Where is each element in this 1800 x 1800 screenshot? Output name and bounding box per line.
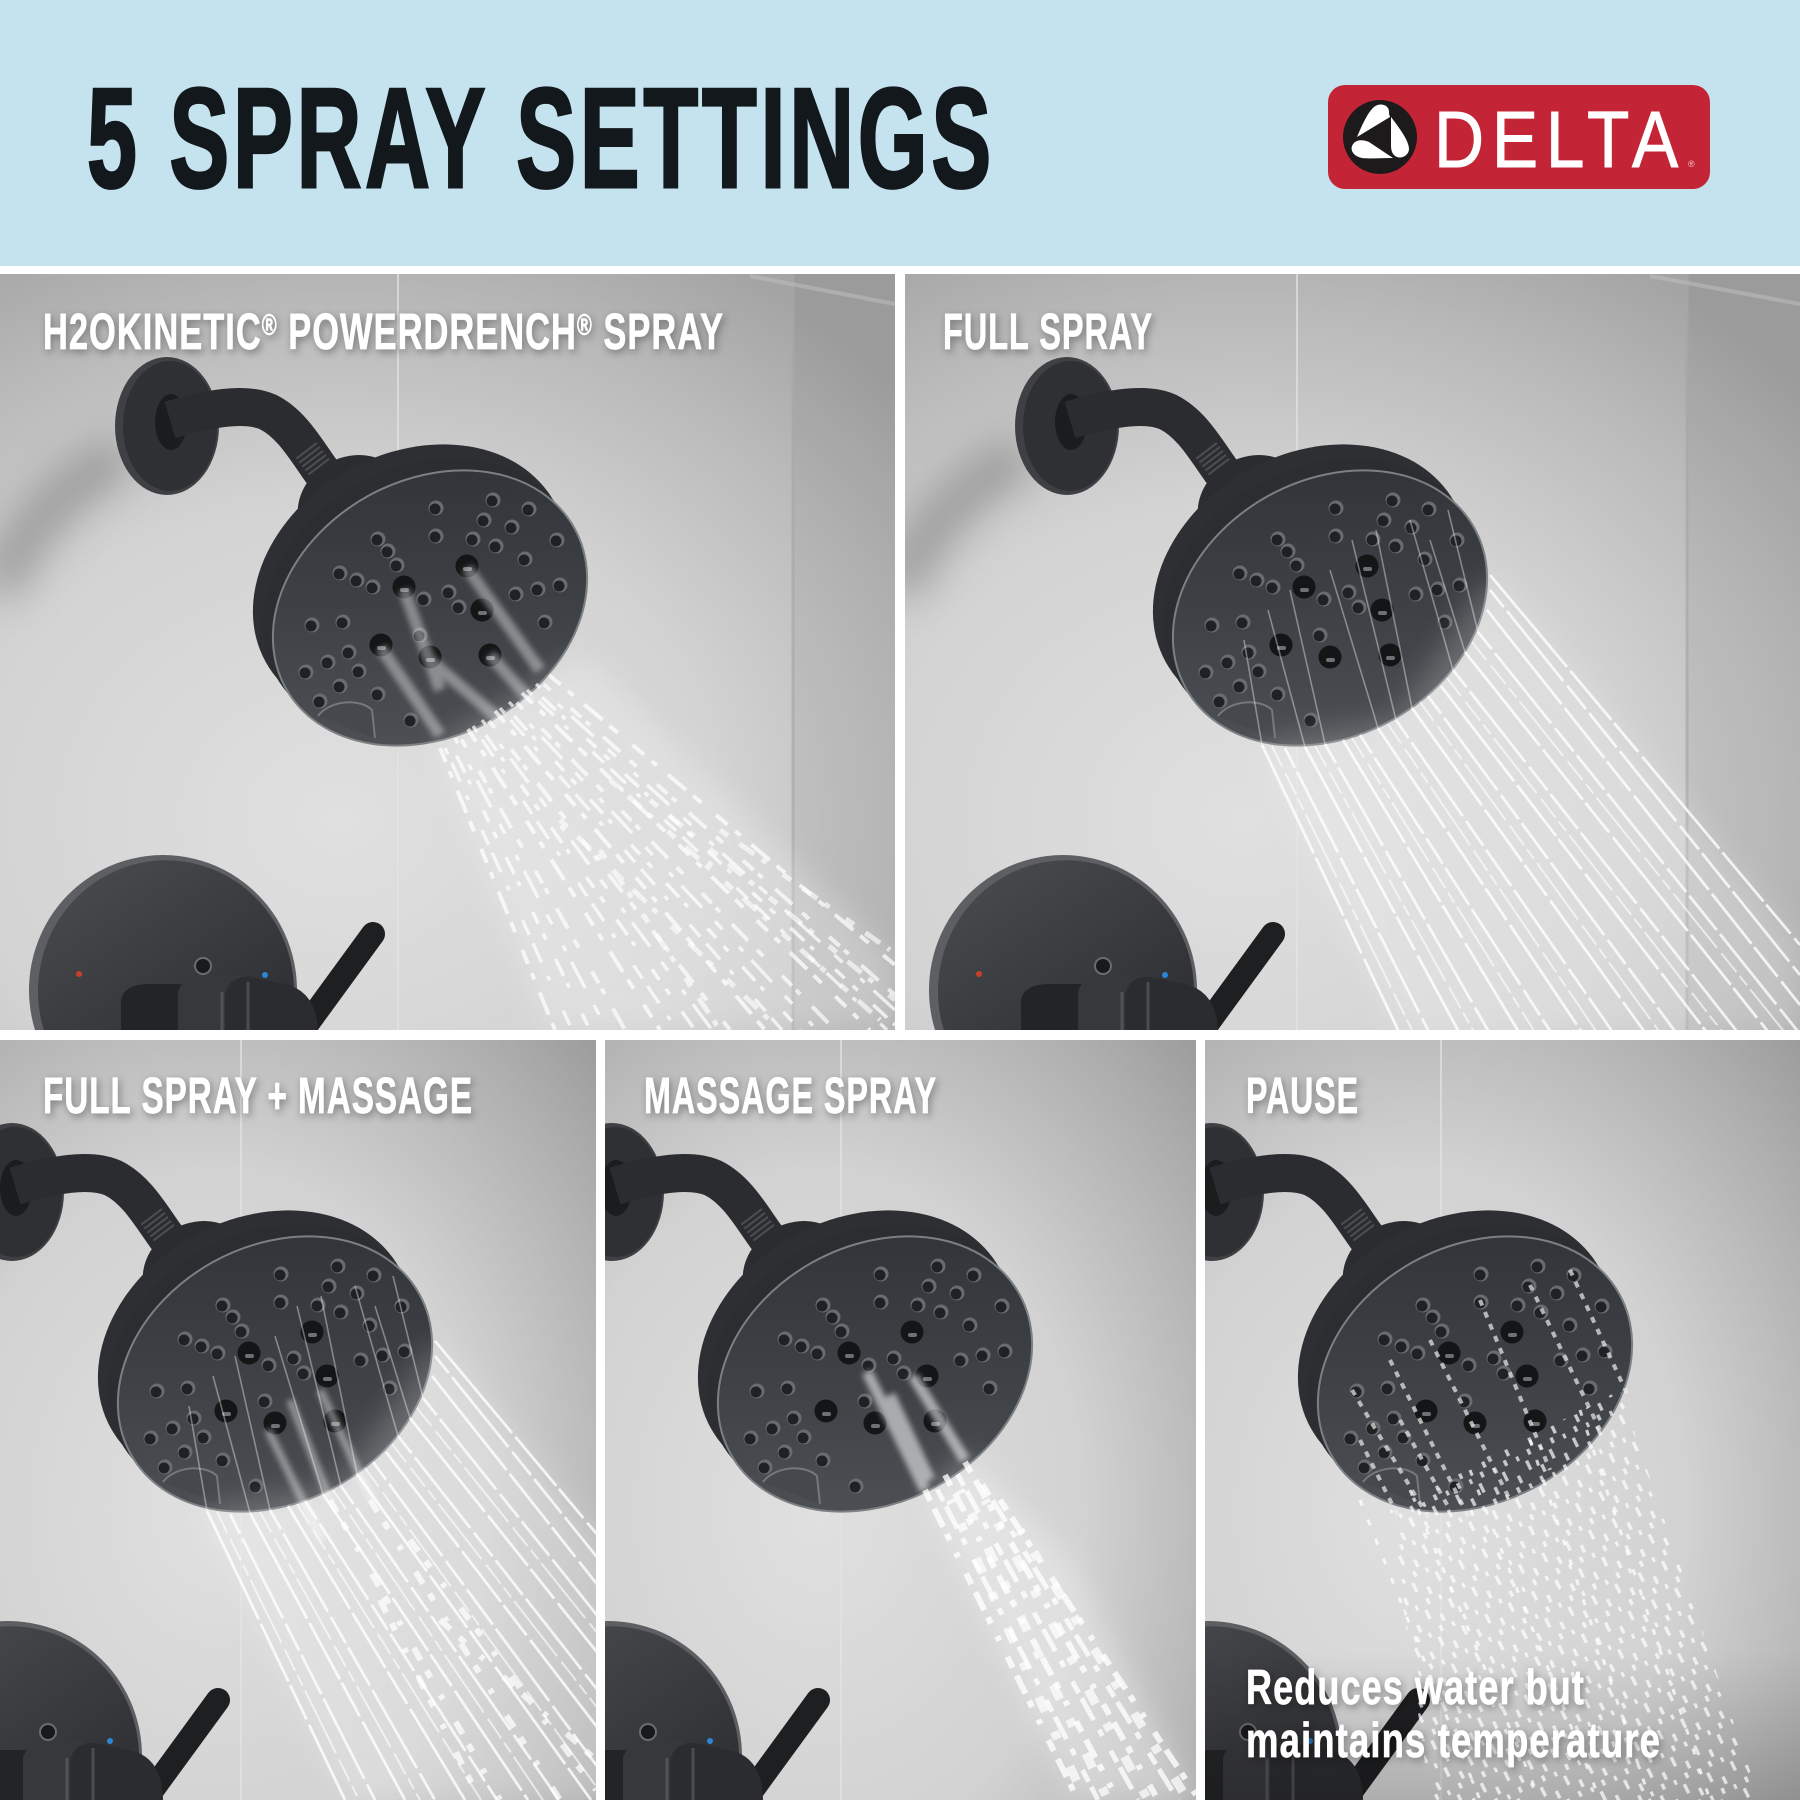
callout: maintains temperature	[1246, 1714, 1661, 1768]
panel heading: H2OKINETIC	[43, 303, 367, 360]
panel heading: FULL SPRAY + MASSAGE	[43, 1067, 473, 1124]
panel: full spray	[905, 274, 1800, 1030]
panel heading: SPRAY	[593, 303, 724, 360]
callout	[1246, 1661, 1661, 1768]
water spray	[1244, 510, 1800, 1034]
panel: H2Okinetic PowerDrench spray	[0, 274, 895, 1030]
panel: pause	[1205, 1040, 1800, 1800]
shower fixture	[900, 357, 1536, 1034]
panel: full spray plus massage	[0, 1040, 596, 1800]
header band	[0, 0, 1800, 266]
shower fixture	[0, 1123, 481, 1800]
logo wordmark: DELTA	[1434, 95, 1686, 184]
callout: Reduces water but	[1246, 1661, 1585, 1715]
shower fixture	[445, 1123, 1081, 1800]
water droplets	[1352, 1270, 1760, 1800]
panel heading: ®	[262, 309, 278, 342]
water spray	[189, 1276, 745, 1800]
title: 5 SPRAY SETTINGS	[87, 59, 995, 218]
panel heading: POWERDRENCH	[278, 303, 577, 360]
panel heading: FULL SPRAY	[943, 303, 1153, 360]
shower fixture	[0, 357, 636, 1034]
Delta logo	[1328, 85, 1710, 189]
panel heading: PAUSE	[1246, 1067, 1359, 1124]
registered mark: ®	[1688, 159, 1695, 169]
water spray	[867, 1372, 1196, 1800]
icon: Delta triangle mark	[1343, 100, 1417, 174]
panel heading: ®	[577, 309, 593, 342]
water spray	[381, 568, 895, 1030]
panel heading: MASSAGE SPRAY	[644, 1067, 937, 1124]
panel: massage spray	[605, 1040, 1196, 1800]
shower fixture	[1045, 1123, 1681, 1800]
